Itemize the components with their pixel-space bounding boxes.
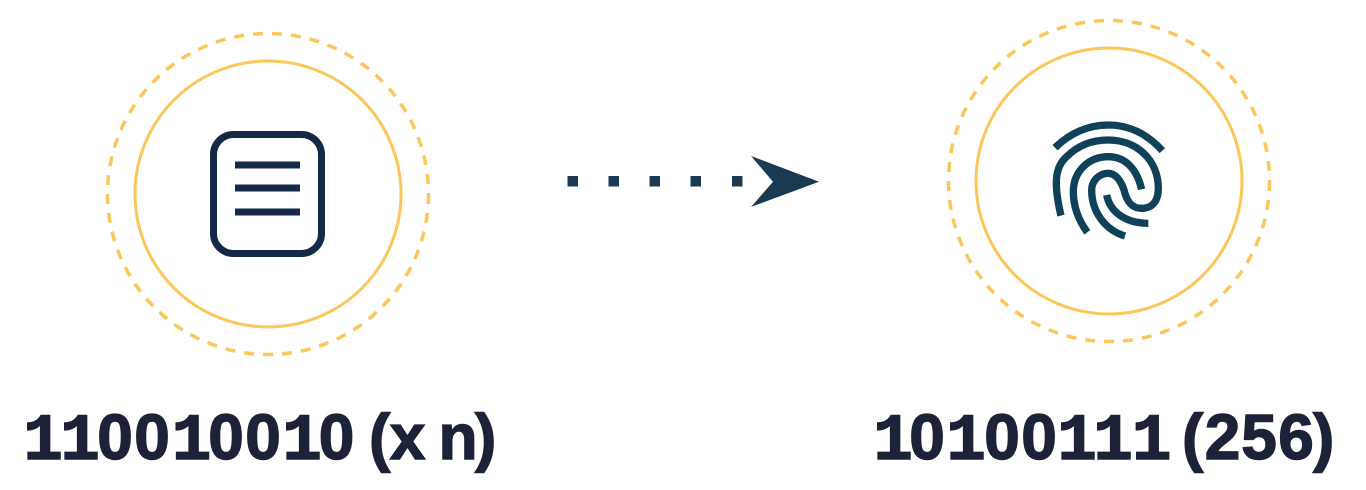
output label: 1 [946,404,986,479]
output label: 1 [873,404,913,479]
input label: 11 [23,404,100,479]
input label: 1 [282,404,322,479]
icon: fingerprint [1055,125,1162,236]
input label: 0 [319,401,354,473]
input label: 00 [208,401,281,473]
output rings [948,20,1270,342]
output label: (256) [1170,401,1334,473]
input label: 00 [97,401,170,473]
input label: (x n) [355,401,496,473]
output label: 00 [984,401,1057,473]
output label: 0 [909,401,945,473]
dotted arrow [568,156,819,207]
icon: document [214,134,322,254]
output label: 111 [1057,404,1172,479]
input rings [108,34,428,354]
input label: 1 [172,404,211,479]
